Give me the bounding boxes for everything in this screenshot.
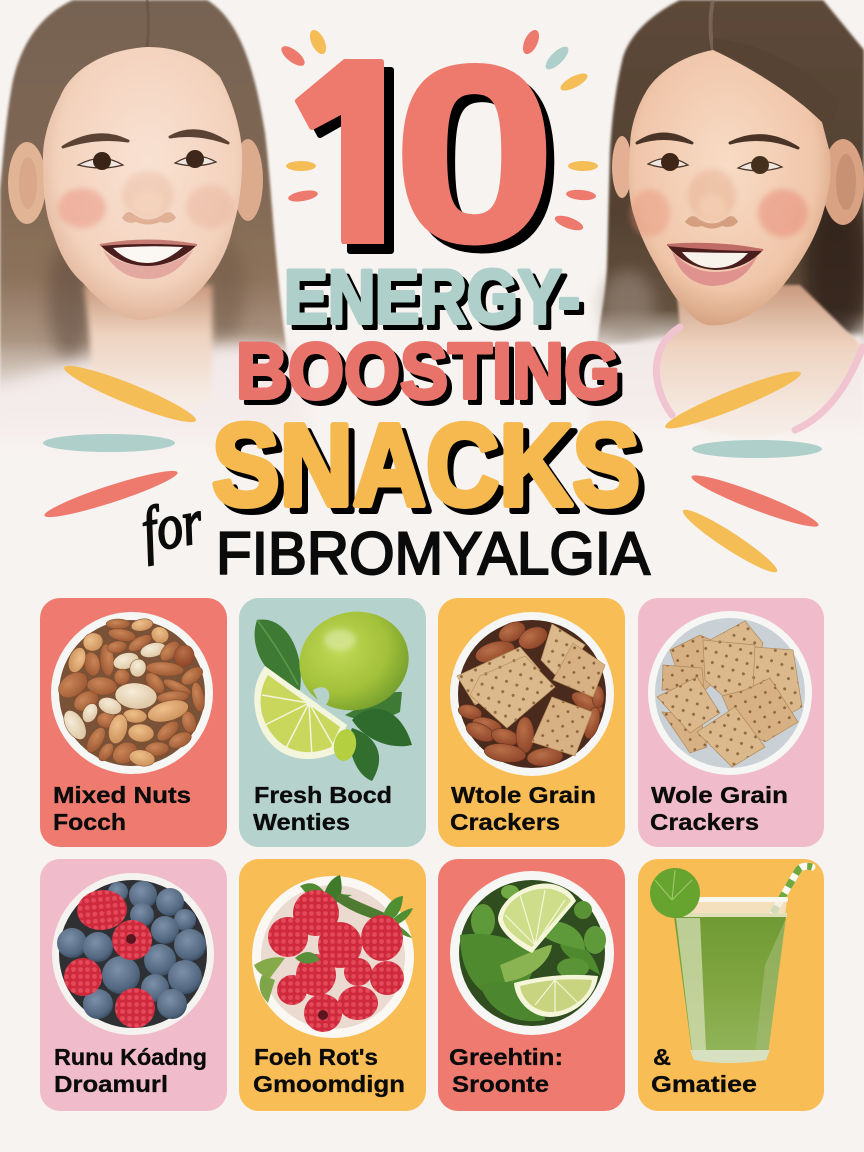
icon: bowl of crackers (648, 611, 812, 775)
title: ENERGY-: ENERGY- (289, 260, 585, 345)
title: script word for: for (136, 485, 208, 566)
card label: whole grain crackers: Crackers (450, 809, 560, 835)
decorative rays left of the title (42, 358, 200, 524)
icon: lime with slice and leaves (254, 600, 419, 781)
icon: bowl of mixed nuts (51, 612, 213, 774)
panel: whole grain crackers with almonds (438, 598, 625, 847)
icon: bowl of raspberries with leaves (252, 875, 414, 1038)
panel: mixed nuts (40, 598, 227, 847)
title: big number 10 (294, 59, 554, 254)
card label: raspberries: Foeh Rot's (254, 1044, 378, 1070)
card label: smoothie: Gmatiee (651, 1071, 757, 1097)
title: ENERGY-: ENERGY- (284, 255, 580, 340)
portrait: right smiling girl (590, 0, 864, 445)
title: big number 10: 1 (299, 17, 417, 291)
card label: whole grain crackers: Wtole Grain (451, 782, 596, 808)
title: big number 10: 0 (393, 14, 556, 295)
panel: raspberries (239, 859, 426, 1111)
panel: green smoothie (638, 859, 824, 1111)
icon: bowl of blueberries and raspberries (52, 873, 214, 1035)
card label: greens: Greehtin: (449, 1044, 563, 1070)
card label: wole grain crackers: Wole Grain (651, 782, 788, 808)
card label: fresh lime: Fresh Bocd (254, 782, 392, 808)
title: FIBROMYALGIA: FIBROMYALGIA (216, 520, 650, 587)
decorative rays right of the title (662, 364, 822, 579)
card label: fresh lime: Wenties (253, 809, 350, 835)
title: big number 10: 0 (401, 22, 564, 303)
title: BOOSTING: BOOSTING (236, 326, 620, 415)
icon: bowl of crackers and almonds (450, 612, 614, 776)
panel: whole grain crackers in plate (638, 598, 824, 847)
card label: mixed berries: Runu Kóadng (54, 1044, 207, 1070)
icon: glass of green smoothie (673, 897, 788, 1063)
panel: greens and lime (438, 859, 625, 1111)
card label: wole grain crackers: Crackers (650, 809, 759, 835)
lime half bottom (514, 975, 598, 1017)
panel: fresh lime (239, 598, 426, 847)
card label: raspberries: Gmoomdign (253, 1071, 405, 1097)
card label: mixed nuts: Focch (53, 809, 126, 835)
lime half top (498, 883, 576, 953)
icon: bowl of greens with lime (450, 871, 614, 1035)
card label: mixed nuts: Mixed Nuts (53, 782, 191, 808)
title: SNACKS: SNACKS (212, 400, 640, 530)
icon: mint leaf garnish (650, 868, 700, 918)
icon: straw (773, 866, 812, 913)
card label: smoothie: & (653, 1044, 671, 1070)
decorative rays around the number 10 (278, 27, 598, 233)
title: SNACKS: SNACKS (218, 406, 646, 536)
panel: mixed berries (40, 859, 227, 1111)
card label: greens: Sroonte (452, 1071, 549, 1097)
card label: mixed berries: Droamurl (54, 1071, 168, 1097)
title: BOOSTING: BOOSTING (241, 331, 625, 420)
portrait: left smiling girl (0, 0, 305, 460)
